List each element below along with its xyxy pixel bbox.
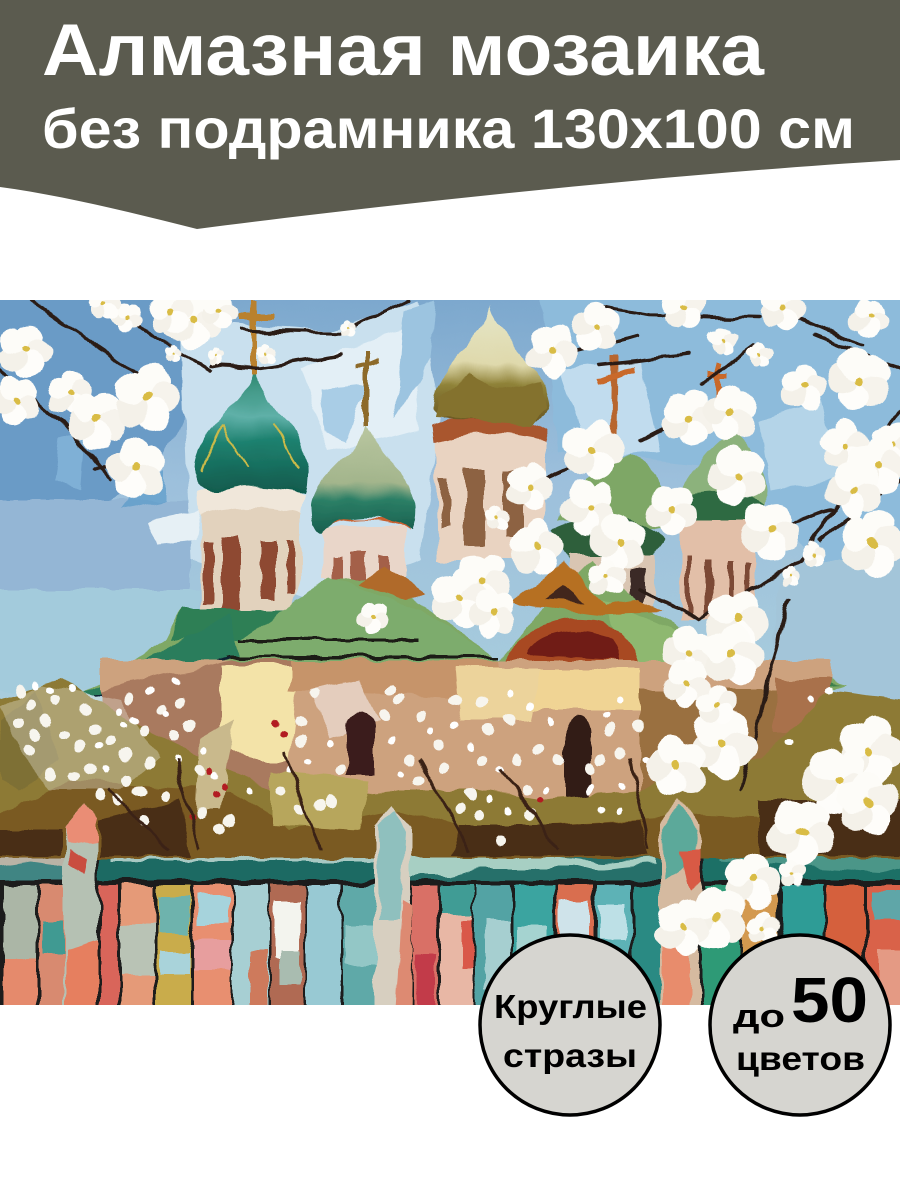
painting: church with blossoms [0, 278, 900, 1015]
badge: up to 50 colours: 50 [791, 964, 868, 1036]
badge: round rhinestones [480, 935, 660, 1115]
fence [0, 800, 900, 1015]
sky [0, 290, 900, 720]
blossoms: top right [525, 300, 900, 536]
badge: round rhinestones: стразы [503, 1037, 637, 1074]
badge: up to 50 colours: цветов [736, 1040, 865, 1077]
flowering bushes [0, 680, 900, 860]
dome: middle green [311, 350, 416, 580]
blossoms: lower right [636, 686, 900, 962]
fence slats [4, 885, 900, 1015]
title line 2: без подрамника 130х100 см [42, 97, 855, 160]
blossoms: centre and right branch [424, 458, 900, 717]
badge: up to 50 colours: до [733, 998, 785, 1034]
blossom branches [0, 300, 900, 790]
blossoms: top left [0, 281, 395, 639]
church wall [100, 657, 832, 800]
badge: round rhinestones: Круглые [494, 988, 647, 1025]
dome: right golden [431, 305, 550, 560]
header banner [0, 0, 900, 229]
church windows [347, 711, 374, 775]
dome: far right pair [555, 355, 767, 620]
dome: left teal [194, 300, 307, 610]
title line 1: Алмазная мозаика [42, 10, 766, 91]
church roof [80, 560, 845, 695]
fence rail [0, 858, 900, 880]
badge: up to 50 colours [710, 935, 890, 1115]
fence posts [63, 800, 700, 1015]
